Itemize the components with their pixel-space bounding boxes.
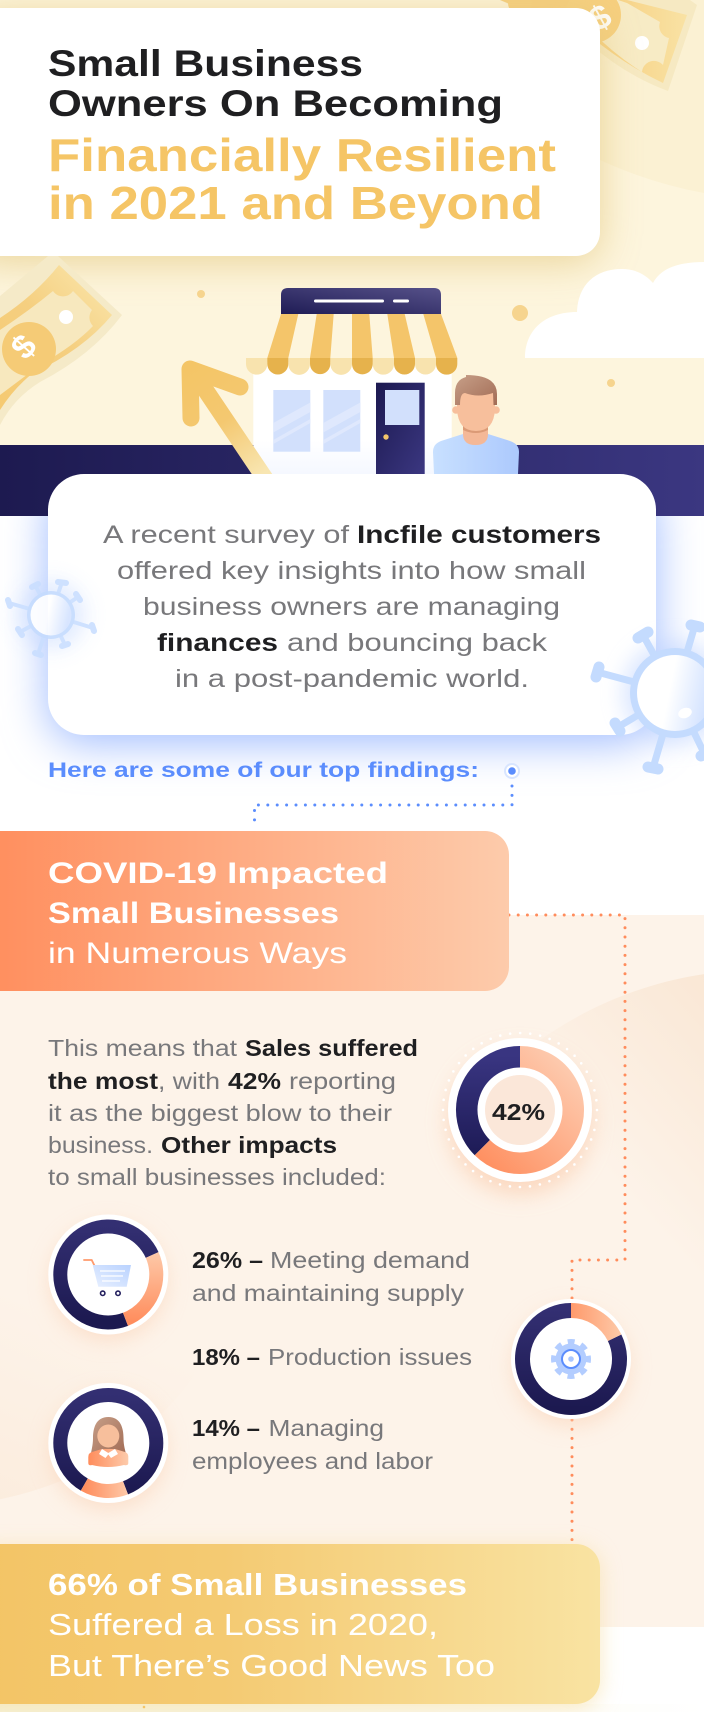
title line: yellow — [48, 129, 556, 229]
hero background — [0, 0, 704, 445]
donut chart: 42%: 42% — [492, 1099, 545, 1125]
paragraph: impact on sales: Sales suffered — [245, 1035, 418, 1061]
icon: virus right — [596, 625, 704, 769]
intro text — [103, 521, 601, 693]
storefront — [190, 288, 519, 483]
section heading: 66%: 66% of Small Businesses — [48, 1567, 467, 1602]
stat: 18%: Production issues — [268, 1344, 472, 1370]
title card — [0, 8, 600, 262]
shop door — [376, 383, 425, 475]
title line: black: Small Business — [48, 43, 363, 84]
intro card glow — [48, 482, 656, 743]
stat: 26%: 26% – — [192, 1247, 263, 1273]
paragraph: impact on sales: to small businesses included: — [48, 1164, 386, 1190]
cloud — [525, 262, 704, 358]
title line: yellow: Financially Resilient — [48, 129, 556, 181]
stat: 14%: employees and labor — [192, 1448, 433, 1474]
shop building — [253, 362, 452, 474]
icon: banknote left — [0, 256, 122, 425]
section heading: covid: COVID-19 Impacted — [48, 857, 388, 890]
blue marker — [504, 763, 520, 779]
icon: banknote left: $ — [4, 327, 45, 367]
intro text: and bouncing back — [287, 629, 548, 657]
stat: 14%: 14% – — [192, 1415, 260, 1441]
intro text: business owners are managing — [143, 593, 560, 621]
title line: black: Owners On Becoming — [48, 83, 503, 124]
stat: 26%: Meeting demand — [270, 1247, 470, 1273]
intro card — [48, 474, 656, 735]
icon: banknote top right — [500, 0, 697, 91]
section heading: covid: in Numerous Ways — [48, 937, 347, 970]
section heading: 66% — [0, 1544, 600, 1708]
arrow — [190, 369, 268, 483]
stat: 26% — [192, 1247, 470, 1306]
icon: shopping cart — [83, 1260, 131, 1296]
donut chart: 26% shopping cart — [48, 1214, 168, 1340]
section heading: covid: Small Businesses — [48, 897, 339, 930]
paragraph: impact on sales: , with — [158, 1068, 220, 1094]
stat: 14% — [192, 1415, 433, 1474]
shop owner — [433, 375, 519, 474]
intro text: A recent survey of — [103, 521, 349, 549]
title line: black — [48, 43, 503, 124]
dot connector bottom — [143, 1706, 145, 1708]
paragraph: impact on sales: 42% — [228, 1068, 281, 1094]
icon: woman — [88, 1417, 128, 1467]
title — [48, 43, 556, 229]
intro text: in a post-pandemic world. — [175, 665, 529, 693]
paragraph: impact on sales: This means that — [48, 1035, 238, 1061]
bottom strip — [0, 1704, 704, 1712]
paragraph: impact on sales — [48, 1035, 418, 1190]
paragraph: impact on sales: business. — [48, 1132, 153, 1158]
paragraph: impact on sales: the most — [48, 1068, 158, 1094]
shop windows — [273, 390, 360, 452]
intro text: offered key insights into how small — [117, 557, 586, 585]
intro text: Incfile customers — [357, 521, 601, 549]
intro text: finances — [157, 629, 278, 657]
section heading: 66%: But There’s Good News Too — [48, 1648, 495, 1683]
icon: gear — [554, 1342, 588, 1376]
stat list — [192, 1247, 472, 1474]
title line: yellow: in 2021 and Beyond — [48, 177, 543, 229]
awning — [246, 314, 457, 375]
stat: 18%: 18% – — [192, 1344, 260, 1370]
donut chart: 18% production — [511, 1299, 631, 1425]
dotted connector: blue — [254, 786, 512, 826]
paragraph: impact on sales: it as the biggest blow to their — [48, 1100, 392, 1126]
donut chart: 14% employee — [48, 1383, 168, 1509]
stat: 14%: Managing — [268, 1415, 384, 1441]
icon: virus left — [8, 581, 94, 655]
paragraph: impact on sales: Other impacts — [161, 1132, 337, 1158]
dotted connector: orange — [509, 915, 625, 1541]
ground band — [0, 445, 704, 516]
paragraph: impact on sales: reporting — [289, 1068, 396, 1094]
stat: 18% — [192, 1344, 472, 1370]
stat: 26%: and maintaining supply — [192, 1280, 465, 1306]
shop sign — [281, 288, 441, 314]
section heading: covid — [0, 831, 509, 991]
donut chart: 42% — [443, 1033, 597, 1194]
findings lead-in: Here are some of our top findings: — [48, 759, 479, 782]
section heading: 66%: Suffered a Loss in 2020, — [48, 1607, 438, 1642]
decorative coins — [197, 290, 615, 387]
peach section background — [0, 915, 704, 1627]
